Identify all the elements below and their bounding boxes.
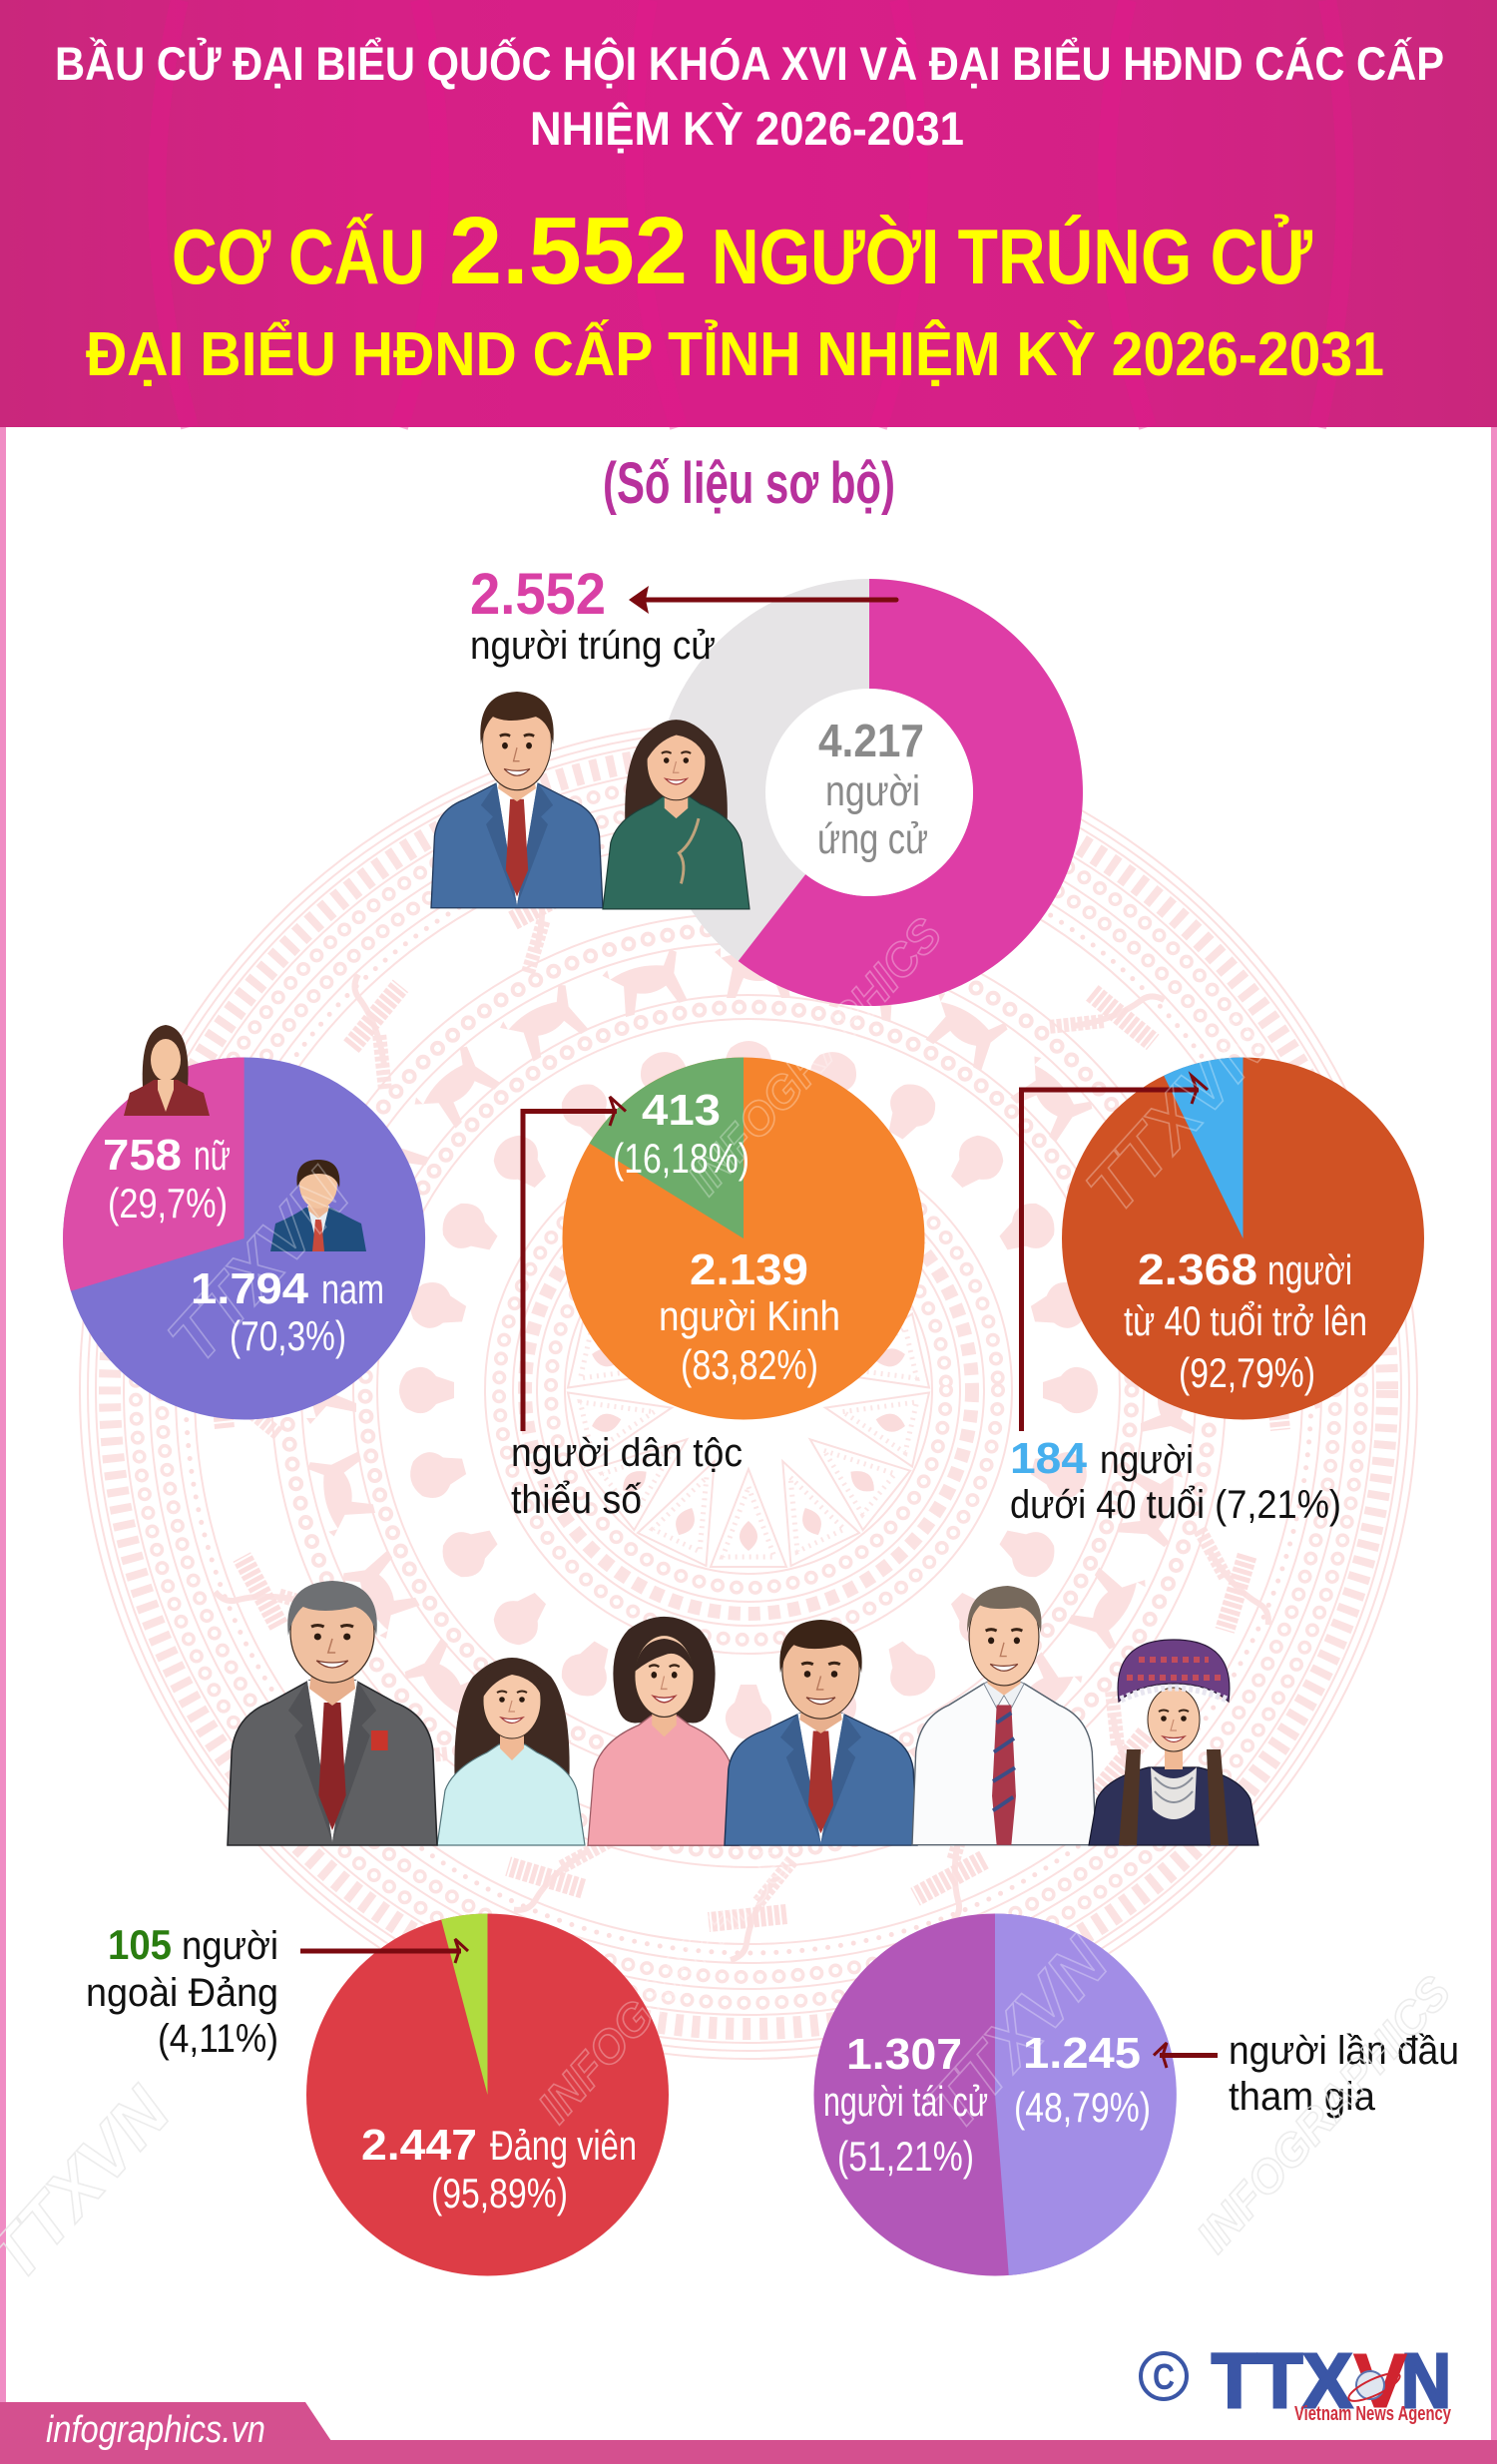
watermarks: INFOGRAPHICS — [678, 908, 952, 1205]
subtitle: (Số liệu sơ bộ) — [603, 451, 895, 516]
donut centre label: người — [825, 767, 920, 815]
main title: NGƯỜI TRÚNG CỬ — [712, 213, 1312, 300]
watermarks: INFOGRAPHICS — [528, 1836, 802, 2133]
label: non-party: (4,11%) — [158, 2017, 278, 2061]
icon: man — [270, 1160, 366, 1251]
label: 2.552 elected — [470, 562, 716, 668]
main title — [172, 198, 1312, 304]
chart: re-election pie: người tái cử — [823, 2078, 988, 2125]
label: first-time: tham gia — [1229, 2075, 1376, 2119]
man in grey suit — [228, 1581, 437, 1845]
main title line 2: ĐẠI BIỂU HĐND CẤP TỈNH NHIỆM KỲ 2026-2031 — [86, 320, 1384, 389]
chart: ethnicity pie: người Kinh — [659, 1292, 840, 1339]
arrow: donut to 2.552 — [629, 586, 896, 614]
label: first-time — [1229, 2029, 1459, 2119]
chart: ethnicity pie: (83,82%) — [681, 1341, 818, 1388]
chart: re-election pie: 1.307 — [846, 2030, 962, 2079]
woman in green ao dai — [603, 720, 749, 909]
young man in white shirt — [912, 1586, 1096, 1845]
label: under 40 — [1010, 1434, 1341, 1527]
chart: age pie: (92,79%) — [1179, 1349, 1315, 1396]
chart: ethnicity pie — [563, 1058, 924, 1419]
arrow: under 40 — [1022, 1076, 1208, 1431]
copyright mark: C — [1153, 2356, 1175, 2397]
label: under 40: người — [1100, 1438, 1194, 1482]
man in blue suit — [431, 692, 603, 908]
chart: donut candidates — [656, 579, 1083, 1006]
pie labels: nữ — [194, 1132, 231, 1179]
pie labels: nam — [321, 1265, 384, 1312]
arrow: non-party — [300, 1939, 468, 1963]
label: ethnic minority — [511, 1431, 743, 1522]
chart: age pie: người — [1267, 1246, 1352, 1293]
chart: ethnicity pie: (16,18%) — [613, 1135, 749, 1182]
pie labels — [103, 1131, 384, 1359]
pie labels: (29,7%) — [108, 1180, 228, 1227]
chart: age pie — [1062, 1058, 1424, 1419]
chart: party membership pie: 2.447 — [361, 2121, 477, 2170]
label: ethnic minority: người dân tộc — [511, 1431, 743, 1475]
chart: age pie: 2.368 — [1138, 1245, 1257, 1294]
chart: re-election pie: (48,79%) — [1014, 2084, 1151, 2131]
man in blue suit — [725, 1620, 917, 1845]
chart: re-election pie: 1.245 — [1023, 2029, 1141, 2078]
chart: age pie: từ 40 tuổi trở lên — [1124, 1297, 1367, 1344]
ethnic minority woman — [1089, 1640, 1258, 1845]
label: first-time: người lần đầu — [1229, 2029, 1459, 2073]
main title: CƠ CẤU — [172, 213, 425, 300]
background bronze drum pattern — [80, 722, 1417, 2059]
main title: 2.552 — [449, 198, 688, 304]
chart: ethnicity pie: 2.139 — [690, 1245, 808, 1294]
wordmark — [1212, 2338, 1452, 2425]
label: non-party — [86, 1921, 278, 2061]
label: under 40: 184 — [1010, 1434, 1088, 1483]
chart: party membership pie — [306, 1914, 669, 2275]
label: ethnic minority: thiểu số — [511, 1478, 642, 1522]
donut centre label: ứng cử — [817, 815, 928, 863]
icon: woman — [124, 1025, 210, 1116]
label: non-party: 105 — [108, 1921, 172, 1968]
wordmark: TTX — [1212, 2338, 1352, 2424]
label: non-party: người — [182, 1924, 278, 1968]
wordmark: N — [1401, 2338, 1451, 2424]
donut centre label: 4.217 — [818, 715, 924, 766]
illustration: elected couple — [431, 692, 749, 909]
header banner — [0, 0, 1497, 427]
pie labels: (70,3%) — [230, 1312, 346, 1359]
pie labels: 758 — [103, 1131, 182, 1180]
chart: ethnicity pie: 413 — [642, 1086, 721, 1135]
arrow: ethnic minority — [523, 1097, 626, 1431]
watermarks: TTXVN — [1071, 1004, 1283, 1228]
wordmark: V — [1353, 2338, 1407, 2424]
donut centre label — [817, 715, 928, 863]
footer bar — [0, 2402, 1497, 2464]
watermarks: TTXVN — [911, 1922, 1124, 2146]
chart: re-election pie — [814, 1913, 1177, 2275]
label: non-party: ngoài Đảng — [86, 1971, 278, 2015]
watermarks: INFOGRAPHICS — [1187, 1966, 1461, 2262]
woman in light blue ao dai — [437, 1658, 585, 1845]
chart: gender pie — [63, 1025, 425, 1419]
watermarks — [0, 908, 1461, 2295]
woman in pink ao dai — [588, 1617, 739, 1845]
chart: party membership pie: Đảng viên — [490, 2122, 637, 2169]
chart: party membership pie: (95,89%) — [431, 2170, 568, 2217]
logo: TTXVN — [1141, 2338, 1452, 2425]
watermarks: TTXVN — [153, 1154, 365, 1377]
pie labels: 1.794 — [191, 1264, 309, 1313]
copyright mark — [1141, 2353, 1187, 2399]
header line 2: NHIỆM KỲ 2026-2031 — [530, 102, 964, 155]
chart: re-election pie: (51,21%) — [837, 2133, 974, 2180]
arrow: first-time — [1154, 2043, 1218, 2068]
illustration: six representatives — [228, 1581, 1258, 1845]
label: 2.552 elected: người trúng cử — [470, 624, 716, 668]
footer site name: infographics.vn — [46, 2409, 265, 2451]
label: under 40: dưới 40 tuổi (7,21%) — [1010, 1483, 1341, 1527]
label: 2.552 elected: 2.552 — [470, 562, 606, 627]
